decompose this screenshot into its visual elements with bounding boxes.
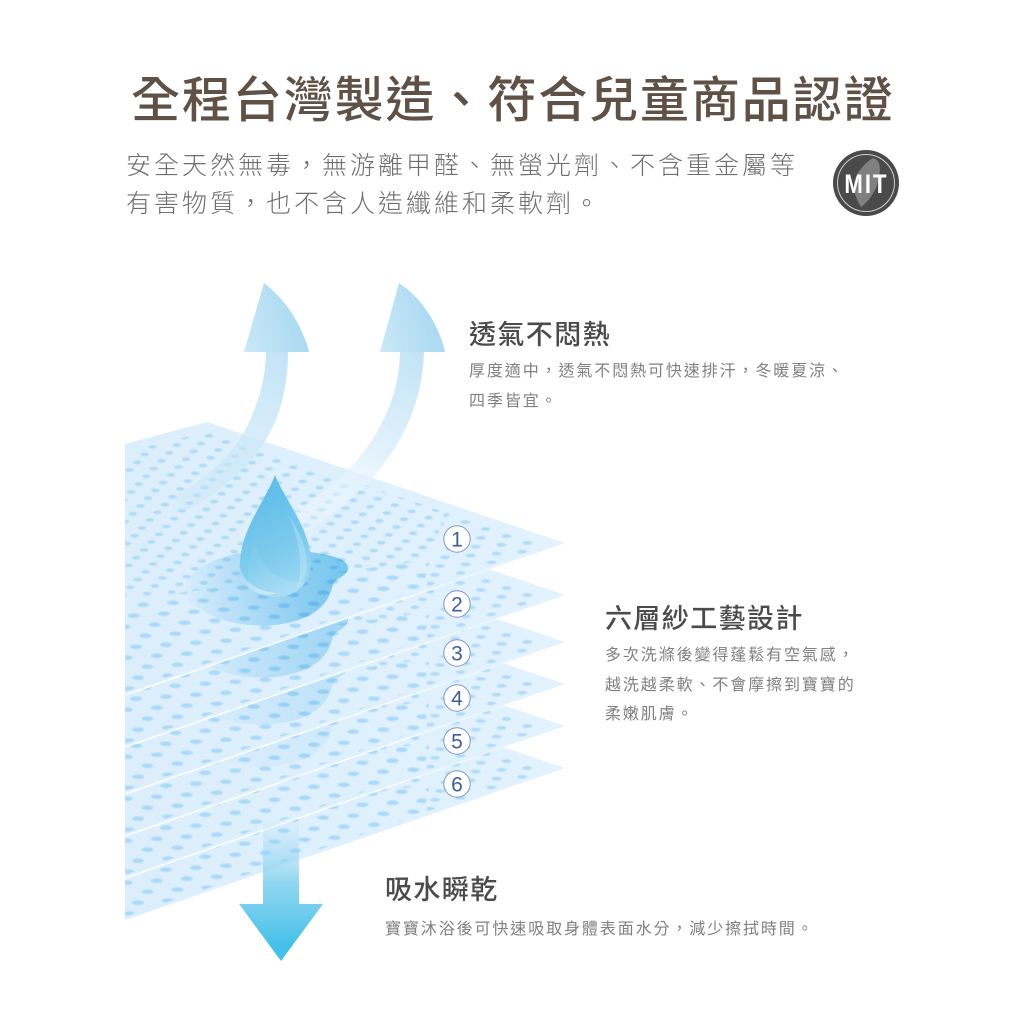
arrow: right air flow up: [290, 283, 445, 532]
layer number 1: 1: [451, 528, 463, 552]
arrow: water flow down: [239, 820, 323, 961]
intro text: 有害物質，也不含人造纖維和柔軟劑。: [126, 190, 602, 218]
text: six layer gauze: 越洗越柔軟、不會摩擦到寶寶的: [605, 676, 856, 694]
text: absorbent: 寶寶沐浴後可快速吸取身體表面水分，減少擦拭時間。: [385, 921, 815, 938]
title: 全程台灣製造、符合兒童商品認證: [131, 74, 895, 128]
text: breathable: 厚度適中，透氣不悶熱可快速排汗，冬暖夏涼、: [469, 363, 845, 380]
diagram: six layer gauze sheets with arrows and water drop: [125, 150, 899, 961]
layer number 3: 3: [451, 642, 463, 666]
layer number 2: [444, 591, 470, 617]
text: six layer gauze: [605, 646, 856, 723]
sheet 3 with water stain: [125, 521, 570, 819]
text: six layer gauze: 柔嫩肌膚。: [605, 706, 695, 723]
heading: six layer gauze: 六層紗工藝設計: [605, 604, 804, 634]
sheet 2 with water stain: [125, 474, 570, 772]
heading: breathable: 透氣不悶熱: [469, 320, 611, 350]
sheet 1 with puddle: [125, 422, 570, 720]
layer number 5: [444, 728, 470, 754]
layer number 4: [444, 685, 470, 711]
icon: water drop: [240, 475, 311, 597]
layer number 6: 6: [451, 774, 463, 796]
layer number 5: 5: [451, 730, 463, 754]
sheet 6: [125, 647, 570, 945]
layer number 4: 4: [451, 688, 463, 710]
layer number 3: [444, 640, 470, 666]
heading: absorbent: 吸水瞬乾: [385, 875, 499, 905]
sheet 5: [125, 605, 570, 903]
layer number 2: 2: [451, 594, 463, 616]
icon: MIT badge: [833, 150, 899, 216]
layer number 1: [444, 526, 470, 552]
sheet 4 with faint water stain: [125, 563, 570, 861]
intro text: [126, 152, 798, 218]
arrow: left air flow up: [172, 283, 309, 512]
text: breathable: 四季皆宜。: [469, 392, 559, 410]
intro text: 安全天然無毒，無游離甲醛、無螢光劑、不含重金屬等: [126, 152, 798, 180]
text: six layer gauze: 多次洗滌後變得蓬鬆有空氣感，: [605, 647, 856, 664]
icon: MIT badge: MIT: [844, 170, 889, 200]
layer number 6: [444, 771, 470, 797]
text: breathable: [469, 362, 845, 410]
